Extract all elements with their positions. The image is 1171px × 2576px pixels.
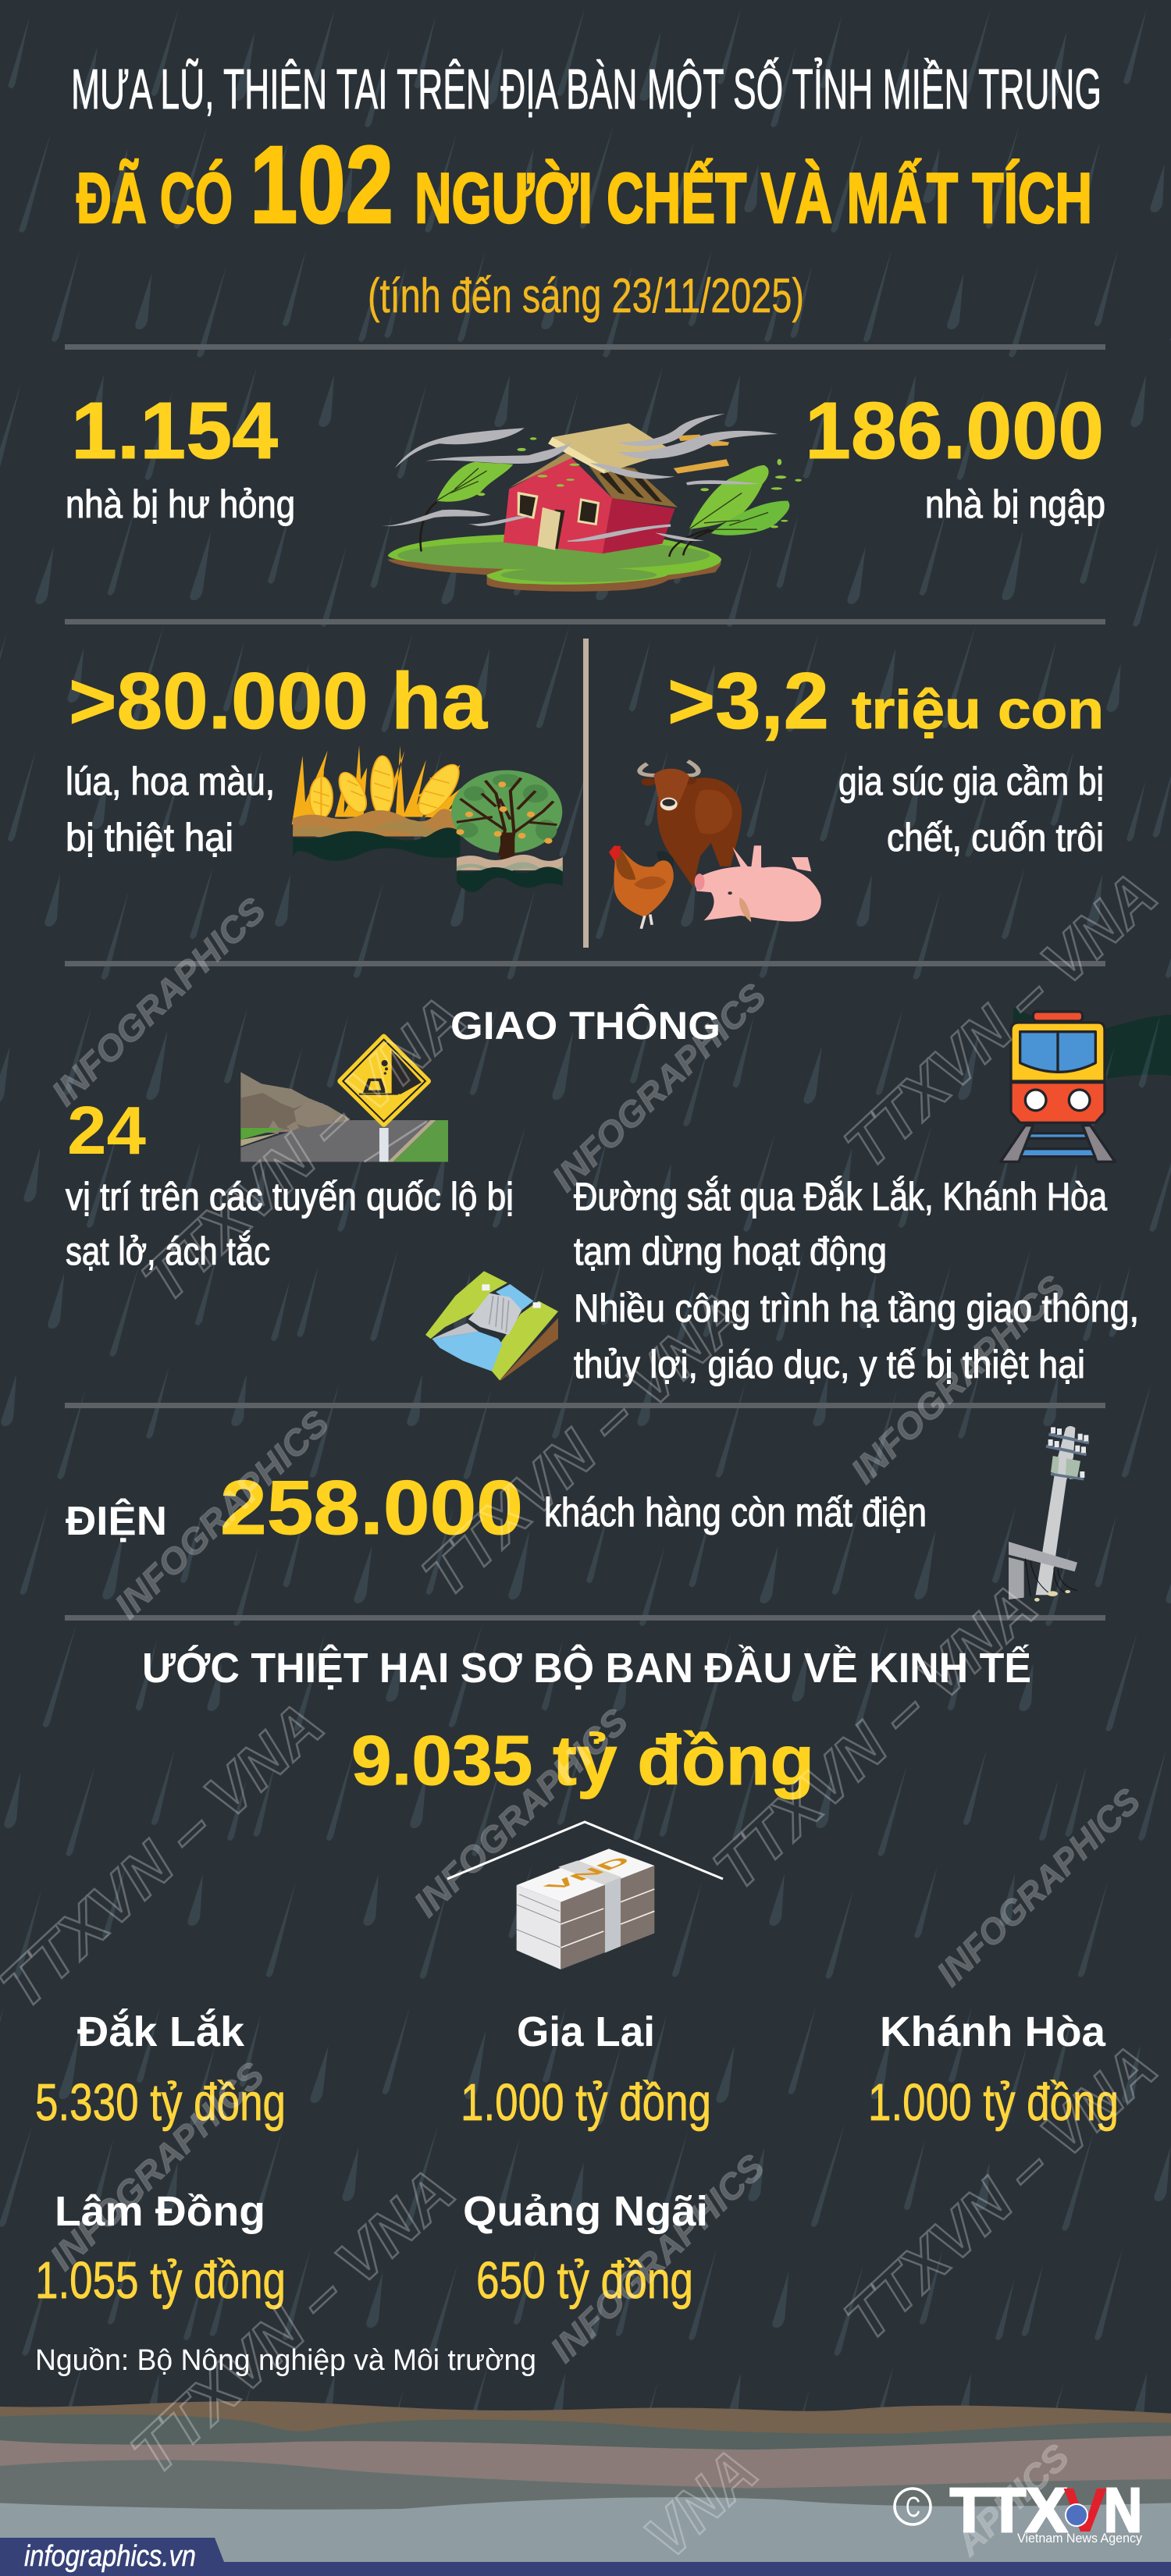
livestock description: chết, cuốn trôi: [887, 816, 1104, 859]
stat: damaged houses: 1.154: [71, 386, 278, 475]
Dak Lak: Đắk Lắk: [77, 2008, 245, 2055]
logo: TTXVN: C: [906, 2491, 920, 2523]
road description: vị trí trên các tuyến quốc lộ bị: [66, 1175, 514, 1219]
stat: damaged houses: nhà bị hư hỏng: [66, 482, 295, 526]
watermarks: INFOGRAPHICS: [843, 1267, 1073, 1491]
livestock description: gia súc gia cầm bị: [838, 760, 1104, 803]
electricity description: khách hàng còn mất điện: [544, 1490, 927, 1535]
panel: transport: [66, 1003, 1139, 1386]
stat: customers without power: 258.000: [220, 1464, 523, 1550]
logo: TTXVN: Vietnam News Agency: [1017, 2531, 1142, 2546]
crop description: [66, 760, 275, 859]
heading: economic damage: ƯỚC THIỆT HẠI SƠ BỘ BAN ĐẦU VỀ KINH TẾ: [142, 1644, 1031, 1692]
watermarks: INFOGRAPHICS: [406, 1700, 635, 1924]
watermarks: INFOGRAPHICS: [44, 889, 273, 1113]
icon: train: [1001, 1012, 1115, 1162]
heading: transport: GIAO THÔNG: [450, 1003, 721, 1048]
stat: livestock: >3,2: [667, 656, 829, 745]
Gia Lai: Gia Lai: [517, 2008, 655, 2055]
title line 2: ĐÃ CÓ: [77, 159, 233, 238]
chevron bracket: [447, 1822, 723, 1879]
road description: [66, 1175, 514, 1273]
stat: livestock: [667, 656, 1104, 745]
watermarks: TTXVN – VNA: [409, 1278, 759, 1610]
watermarks: INFOGRAPHICS: [544, 975, 774, 1199]
Lam Dong: Lâm Đồng: [55, 2188, 265, 2235]
icon: dam: [425, 1271, 558, 1380]
footer site tab: infographics.vn: [24, 2540, 196, 2573]
crop description: lúa, hoa màu,: [66, 760, 275, 803]
road description: sạt lở, ách tắc: [66, 1229, 270, 1273]
watermarks: APHICS: [947, 2436, 1077, 2564]
panel: electricity: [66, 1426, 1089, 1602]
icon: cow chicken pig: [609, 761, 821, 929]
label: electricity: ĐIỆN: [66, 1498, 167, 1544]
watermarks: TTXVN – VNA: [700, 1571, 1050, 1903]
dark green wave behind train: [1013, 1008, 1171, 1079]
icon: VND money stack: VND: [539, 1855, 637, 1893]
Gia Lai: 1.000 tỷ đồng: [461, 2073, 711, 2132]
Gia Lai: [461, 2008, 711, 2132]
title line 2: 102: [250, 123, 393, 246]
panel: livestock: [609, 656, 1104, 929]
stat: flooded houses: [805, 386, 1105, 526]
stat: flooded houses: 186.000: [805, 386, 1104, 475]
watermarks: VNA: [632, 2435, 771, 2571]
watermarks: TTXVN – VNA: [831, 2032, 1170, 2354]
panel: crops: [66, 656, 563, 892]
stat: livestock: triệu con: [852, 679, 1104, 740]
crop description: bị thiệt hại: [66, 816, 233, 859]
divider: vertical: [583, 639, 589, 948]
panel: economic damage: [35, 1644, 1119, 2377]
icon: VND money stack: [517, 1848, 654, 1969]
livestock description: [838, 760, 1104, 859]
stat: road locations: 24: [67, 1093, 146, 1169]
stat: flooded houses: nhà bị ngập: [925, 482, 1105, 526]
Khanh Hoa: [868, 2008, 1119, 2132]
navy footer bar: [0, 2562, 1171, 2576]
stat: damaged houses: [66, 386, 295, 526]
panel: houses: [66, 386, 1105, 592]
watermarks: INFOGRAPHICS: [543, 2146, 772, 2370]
watermarks: INFOGRAPHICS: [42, 2054, 272, 2278]
icon: flooded rice and fruit tree: [292, 745, 563, 892]
stat: total damage: 9.035 tỷ đồng: [351, 1722, 814, 1800]
Lam Dong: 1.055 tỷ đồng: [35, 2251, 286, 2310]
infrastructure description: thủy lợi, giáo dục, y tế bị thiệt hại: [574, 1343, 1085, 1386]
Dak Lak: [35, 2008, 286, 2132]
date: (tính đến sáng 23/11/2025): [368, 269, 804, 323]
watermarks: INFOGRAPHICS: [107, 1402, 336, 1626]
icon: landslide road sign: [240, 1037, 448, 1162]
title block: [71, 57, 1102, 323]
watermarks: TTXVN – VNA: [118, 2155, 468, 2488]
logo: TTXVN: N: [1104, 2475, 1142, 2545]
logo: TTXVN: [895, 2475, 1142, 2546]
watermarks: TTXVN – VNA: [831, 859, 1170, 1181]
watermarks: TTXVN – VNA: [129, 983, 479, 1315]
Lam Dong: [35, 2188, 286, 2310]
infrastructure description: [574, 1286, 1139, 1386]
logo: TTXVN: TTX: [950, 2475, 1067, 2545]
title line 2: [77, 123, 1092, 246]
source: Nguồn: Bộ Nông nghiệp và Môi trường: [35, 2344, 536, 2377]
logo: TTXVN: V: [1063, 2475, 1107, 2545]
Quang Ngai: 650 tỷ đồng: [476, 2251, 693, 2310]
rail description: tạm dừng hoạt động: [574, 1229, 887, 1273]
Dak Lak: 5.330 tỷ đồng: [35, 2073, 286, 2132]
Quang Ngai: Quảng Ngãi: [463, 2188, 708, 2235]
Khanh Hoa: Khánh Hòa: [880, 2008, 1106, 2055]
provincial figures: [35, 2008, 1119, 2310]
stat: crop area: >80.000 ha: [69, 656, 488, 745]
watermarks: INFOGRAPHICS: [929, 1780, 1148, 1994]
rail description: [574, 1175, 1107, 1273]
bottom bands of flood water: [0, 2401, 1171, 2576]
Quang Ngai: [463, 2188, 708, 2310]
icon: broken power pole: [1009, 1426, 1089, 1602]
watermarks: [0, 859, 1170, 2571]
icon: house in storm: [383, 414, 802, 592]
